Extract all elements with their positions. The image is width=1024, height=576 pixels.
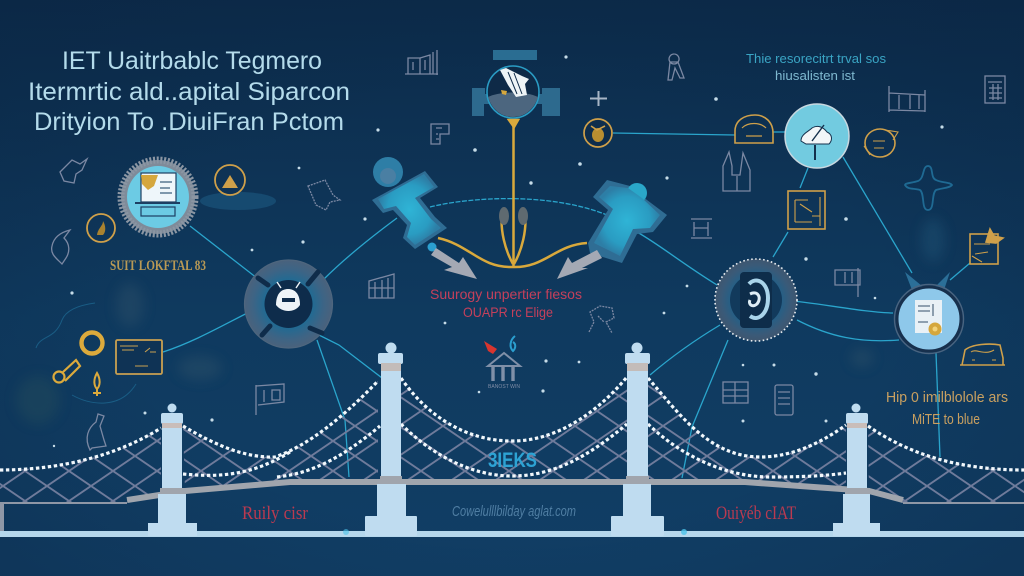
icon: gold card — [116, 340, 162, 374]
icon: right hub — [715, 259, 797, 341]
icon: gold doc with star — [970, 229, 1003, 264]
bridge — [0, 342, 1024, 537]
icon: outline sketches upper right — [691, 76, 1005, 415]
label: red bottom right: Ouiyéb cIAT — [716, 503, 796, 524]
icon: right teal connector — [588, 180, 667, 263]
arrow: right grey — [557, 250, 602, 279]
connector lines — [163, 132, 970, 478]
icon: right document badge — [894, 284, 964, 354]
title: IET Uaitrbablc Tegmero — [62, 47, 322, 75]
icon: centre bank: BANOST WIN — [488, 384, 520, 390]
label: red bottom left: Ruily cisr — [242, 503, 309, 524]
icon: gold ring — [82, 332, 102, 354]
text: top right note — [746, 51, 887, 83]
icon: blue cross outline — [905, 166, 952, 210]
text: bottom right note: MiTE to blue — [912, 412, 980, 428]
icon: gold dome right — [960, 344, 1005, 365]
label: gold left: SUIT LOKFTAL 83 — [110, 258, 206, 274]
text: top right note: hiusalisten ist — [775, 68, 855, 83]
glow sparks on the road — [343, 529, 687, 535]
icon: laptop badge — [121, 160, 195, 234]
tower: centre left — [365, 342, 417, 536]
title — [28, 47, 350, 136]
tower: centre right — [611, 342, 664, 536]
label: red centre — [430, 286, 582, 320]
icon: gold bee badge — [584, 119, 612, 147]
icon: gold key — [93, 373, 101, 396]
gold icons left cluster — [54, 332, 162, 396]
icon: outline sketches left — [52, 159, 340, 450]
arrow: left grey — [431, 248, 477, 279]
cables — [0, 377, 1024, 477]
label: blue bridge: 3IEKS — [488, 449, 537, 472]
star dots — [53, 55, 944, 447]
bridge net lattice — [0, 381, 1024, 503]
icon: dome badge gold — [735, 115, 773, 143]
icon: top centre valve — [472, 50, 560, 118]
tower: far left — [148, 404, 197, 536]
icon: gold circle left — [87, 214, 115, 242]
bridge deck — [0, 482, 1024, 531]
roadway — [0, 531, 1024, 537]
tower: far right — [833, 404, 880, 536]
icon: central hub left — [244, 260, 332, 348]
text: bottom right note: Hip 0 imilblolole ars — [886, 390, 1008, 406]
text: top right note: Thie resorecitrt trval sos — [746, 51, 887, 66]
icon: gold circle with saucer — [200, 165, 276, 210]
icon: leaf crown above right badge — [905, 272, 950, 290]
label: red centre: OUAPR rc Elige — [463, 304, 553, 320]
label: red centre: Suurogy unpertier fiesos — [430, 286, 582, 302]
icon: gold square — [788, 191, 825, 229]
icon: centre bank — [484, 336, 520, 390]
icon: left teal connector — [372, 157, 447, 252]
gold cables — [438, 120, 587, 267]
text: bottom right note — [886, 390, 1008, 428]
dust patches — [16, 218, 945, 424]
icon: upper right circle — [785, 104, 849, 168]
icon: gold pin — [54, 360, 80, 382]
label: website: Cowelulllbilday aglat.com — [452, 504, 576, 520]
title: Drityion To .DiuiFran Pctom — [34, 108, 344, 136]
title: Itermrtic ald..apital Siparcon — [28, 78, 350, 106]
icon: light plus — [590, 91, 607, 106]
icon: outline sketches centre — [369, 50, 684, 333]
icon: gold face — [864, 129, 898, 157]
faint lines around dust — [36, 303, 136, 403]
